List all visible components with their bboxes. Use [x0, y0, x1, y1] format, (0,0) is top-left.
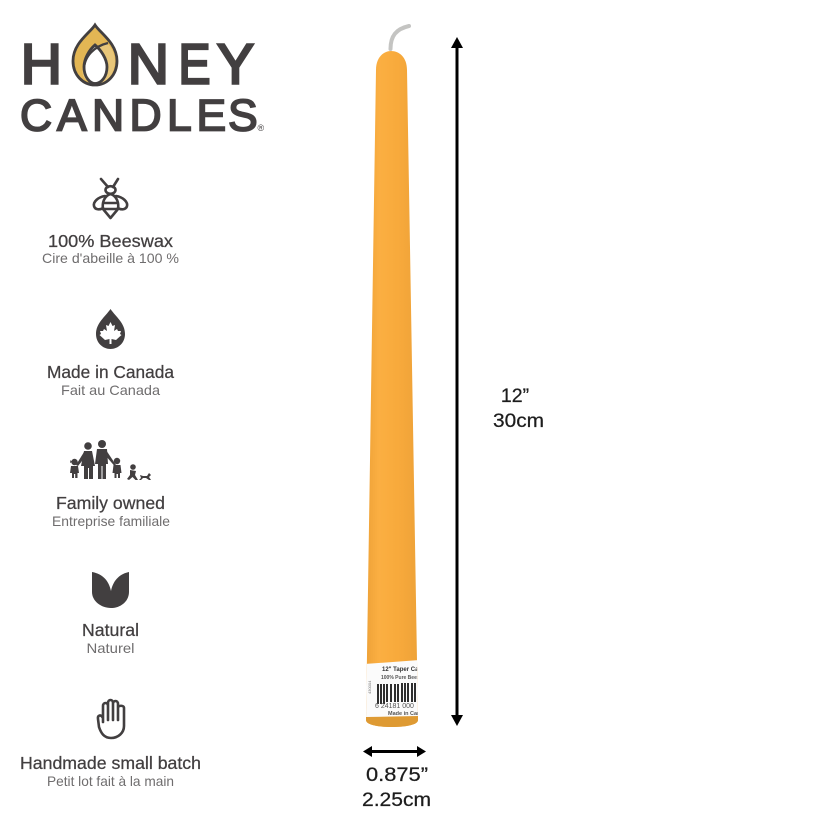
candle label: 6 24181 000 — [375, 703, 414, 710]
candle body — [366, 51, 418, 727]
icon: family — [70, 440, 151, 480]
logo word: CANDLES: CANDLES — [20, 92, 258, 140]
feature: Handmade small batch — [20, 700, 201, 789]
label: height: 30cm — [493, 410, 544, 432]
feature: Made in Canada — [47, 309, 174, 398]
logo word: HONEY: N — [128, 32, 169, 96]
logo word: HONEY — [21, 32, 254, 96]
arrow: diameter — [363, 746, 426, 757]
logo word: HONEY: E — [178, 32, 210, 96]
candle label: Made in Canad — [388, 711, 427, 717]
subheading: Naturel: Naturel — [86, 640, 134, 656]
registered mark: ® — [258, 123, 264, 133]
logo icon: flame drop — [73, 25, 117, 85]
label: height — [493, 385, 544, 432]
icon: maple leaf drop — [96, 309, 125, 349]
feature: Family owned — [52, 440, 170, 529]
feature: Natural — [82, 572, 139, 656]
icon: leaf — [92, 572, 129, 608]
candle label: 430004 — [367, 680, 372, 694]
heading: Made in Canada: Made in Canada — [47, 362, 174, 382]
icon: hand — [98, 700, 124, 738]
logo word: HONEY: H — [21, 32, 62, 96]
subheading: Entreprise familiale: Entreprise familiale — [52, 513, 170, 529]
barcode — [378, 683, 415, 704]
label: diameter — [362, 764, 431, 811]
candle — [366, 24, 418, 727]
label: height: 12” — [501, 385, 529, 407]
label: diameter: 0.875” — [366, 764, 428, 786]
arrow: height — [451, 37, 463, 726]
logo word: HONEY: Y — [217, 32, 254, 96]
candle wick — [390, 26, 409, 49]
icon: bee — [94, 179, 127, 218]
candle label — [366, 660, 418, 727]
heading: Family owned: Family owned — [56, 493, 165, 513]
candle label: 12" Taper Can — [382, 667, 422, 673]
subheading: Fait au Canada: Fait au Canada — [61, 382, 160, 398]
candle label: 100% Pure Bees — [381, 675, 420, 681]
heading: Handmade small batch: Handmade small batch — [20, 753, 201, 773]
heading: Natural: Natural — [82, 620, 139, 640]
heading: 100% Beeswax: 100% Beeswax — [48, 231, 173, 251]
label: diameter: 2.25cm — [362, 789, 431, 811]
subheading: Cire d'abeille: Cire d'abeille à 100 % — [42, 250, 179, 266]
logo: Honey Candles — [20, 25, 264, 140]
subheading: Petit lot fait à la main: Petit lot fait à la main — [47, 773, 174, 789]
feature: 100% Beeswax — [42, 179, 179, 266]
